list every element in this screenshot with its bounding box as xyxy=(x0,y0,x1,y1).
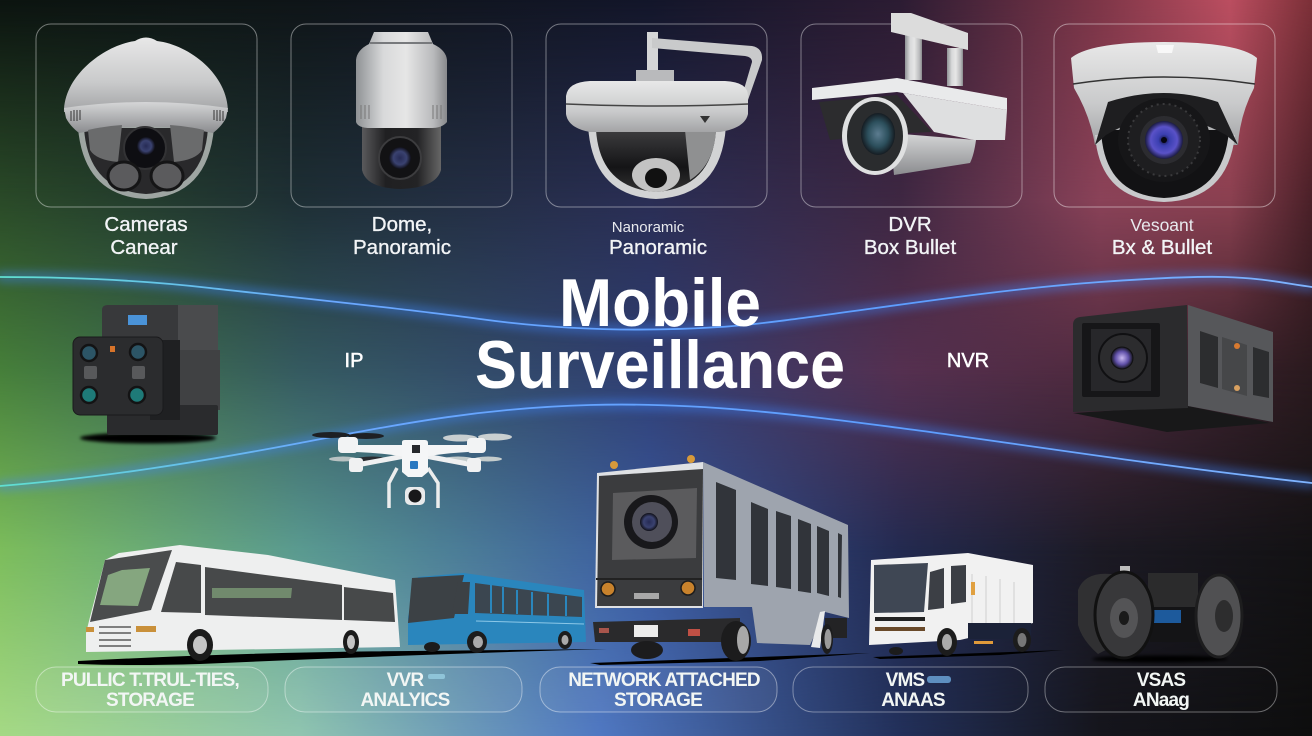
label: Nanoramic Panoramic xyxy=(609,219,707,259)
card frame 3 xyxy=(546,24,767,207)
pill: Public utilities storage: PULLIC T.TRUL-TIES, xyxy=(61,670,239,691)
pill: Public utilities storage: STORAGE xyxy=(106,690,194,711)
card frame 1 xyxy=(36,24,257,207)
icon: panoramic dome camera with arm xyxy=(566,32,762,199)
title xyxy=(475,265,845,403)
label: IP: IP xyxy=(345,350,363,372)
pill: VSAS ANaag xyxy=(1045,667,1277,712)
label: Vesoant Bx & Bullet xyxy=(1112,215,1212,259)
label: NVR: NVR xyxy=(947,350,989,372)
pill: VMS ANAAS: ANAAS xyxy=(881,690,945,711)
pill: Public utilities storage xyxy=(36,667,268,712)
pill: VVR analytics xyxy=(285,667,522,712)
panel: storage labels xyxy=(36,667,1277,712)
label: Dome, Panoramic: Panoramic xyxy=(353,236,451,259)
label: Cameras Canear: Cameras xyxy=(104,213,188,236)
pill: VVR analytics: ANALYICS xyxy=(361,690,450,711)
label: Cameras Canear: Canear xyxy=(110,236,178,259)
card frame 4 xyxy=(801,24,1022,207)
pill: Network attached storage: NETWORK ATTACHED xyxy=(568,670,760,691)
label: Nanoramic Panoramic: Nanoramic xyxy=(612,219,685,236)
label: Vesoant Bx & Bullet: Bx & Bullet xyxy=(1112,236,1212,259)
icon: wheeled camera robot xyxy=(1078,566,1242,662)
card frame 2 xyxy=(291,24,512,207)
icon: rugged multi-lens camera xyxy=(73,305,220,444)
glowing wave lines xyxy=(0,277,1312,486)
label: Cameras Canear xyxy=(104,213,188,259)
icon: box bullet camera xyxy=(812,13,1007,175)
icon: grey camera truck xyxy=(590,455,870,665)
label: Dome, Panoramic xyxy=(353,213,451,259)
label: DVR Box Bullet: DVR xyxy=(888,213,932,236)
icon: multi-lens dome camera xyxy=(64,38,228,199)
icon: white bus xyxy=(78,545,607,665)
title: Mobile xyxy=(559,265,761,341)
title: Surveillance xyxy=(475,327,845,403)
card frame 5 xyxy=(1054,24,1275,207)
icon: blue bus xyxy=(408,573,586,653)
icon: box camera xyxy=(1073,305,1273,432)
pill: VSAS ANaag: VSAS xyxy=(1137,670,1185,691)
label: DVR Box Bullet: Box Bullet xyxy=(864,236,956,259)
icon: PTZ camera xyxy=(356,32,447,189)
pill: Network attached storage xyxy=(540,667,777,712)
label: Vesoant Bx & Bullet: Vesoant xyxy=(1130,215,1194,235)
pill: VVR analytics: VVR xyxy=(387,670,424,691)
icon: turret dome camera xyxy=(1071,42,1257,202)
icon: drone xyxy=(312,432,512,508)
pill: VSAS ANaag: ANaag xyxy=(1133,690,1189,711)
pill: VMS ANAAS: VMS xyxy=(886,670,925,691)
icon: white box truck xyxy=(869,553,1064,659)
label: Dome, Panoramic: Dome, xyxy=(372,213,432,236)
panel: cameras xyxy=(36,13,1275,259)
pill: VMS ANAAS xyxy=(793,667,1028,712)
label: Nanoramic Panoramic: Panoramic xyxy=(609,236,707,259)
label: DVR Box Bullet xyxy=(864,213,956,259)
pill: Network attached storage: STORAGE xyxy=(614,690,702,711)
